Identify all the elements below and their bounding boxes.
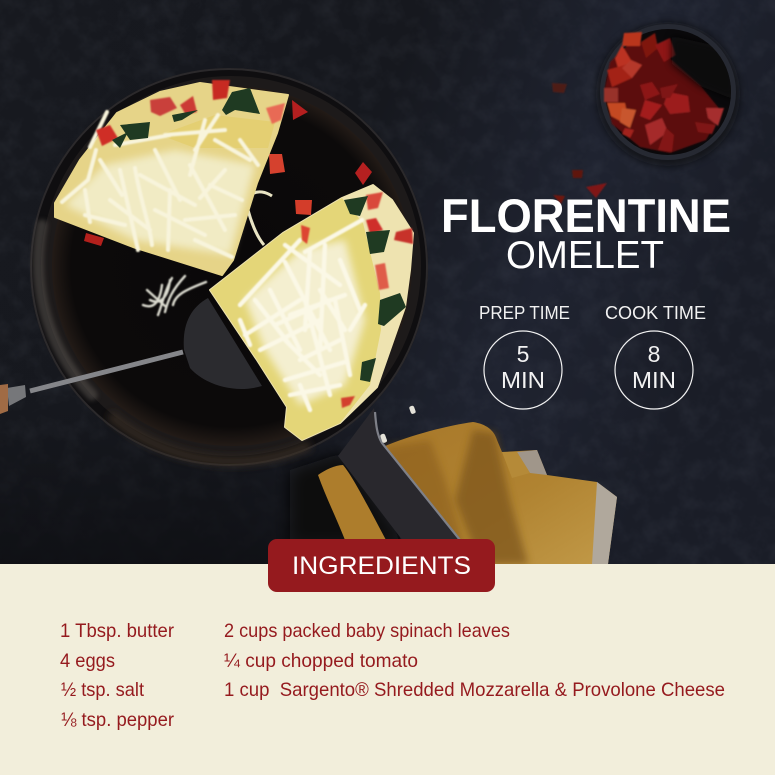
cook time <box>605 303 706 409</box>
rice grains on the surface <box>380 405 416 443</box>
ingredients list: right column <box>224 620 725 701</box>
cream ingredients panel <box>0 564 775 775</box>
prep time: PREP TIME <box>479 303 570 323</box>
ingredients banner <box>268 539 495 592</box>
title <box>441 189 731 277</box>
omelet slice 2 cheese <box>240 220 365 410</box>
ingredients list: left column: 1 Tbsp. butter <box>60 620 174 642</box>
prep time <box>479 303 570 409</box>
photo background: dark slate surface <box>0 0 775 564</box>
omelet slice 1 fold <box>160 115 275 148</box>
ingredients list: right column: 2 cups packed baby spinach leaves <box>224 620 510 642</box>
cook time: MIN <box>632 367 676 393</box>
tomato bowl <box>596 22 740 166</box>
omelet slice 1 cheese <box>62 112 258 257</box>
omelet slice: lower right <box>210 185 413 440</box>
ingredients list: right column: 1 cup Sargento® Shredded Mozzarella & Provolone Cheese <box>224 679 725 701</box>
ingredients list: left column: 4 eggs <box>60 650 115 672</box>
title: FLORENTINE <box>441 189 731 242</box>
cook time: 8 <box>648 341 660 367</box>
ingredients banner: INGREDIENTS <box>292 552 471 580</box>
ingredients list: left column: ½ tsp. salt <box>61 679 145 701</box>
omelet slice: upper left <box>55 83 288 275</box>
cook time: COOK TIME <box>605 303 706 323</box>
ingredients list: left column <box>60 620 174 731</box>
spinach leaves <box>112 88 406 382</box>
handle opening with rolled towel <box>290 452 405 545</box>
ingredients list: right column: ¼ cup chopped tomato <box>224 650 418 672</box>
tomatoes on omelet <box>96 80 413 408</box>
towel <box>383 422 617 564</box>
spatula <box>0 298 262 414</box>
skillet handle <box>338 408 461 541</box>
prep time: MIN <box>501 367 545 393</box>
title: OMELET <box>506 234 664 277</box>
skillet <box>30 68 461 541</box>
scattered tomato pieces <box>552 83 607 204</box>
ingredients list: left column: ⅛ tsp. pepper <box>61 709 174 731</box>
loose tomatoes and cheese in pan <box>84 100 372 315</box>
skillet body <box>30 68 428 466</box>
prep time: 5 <box>517 341 529 367</box>
